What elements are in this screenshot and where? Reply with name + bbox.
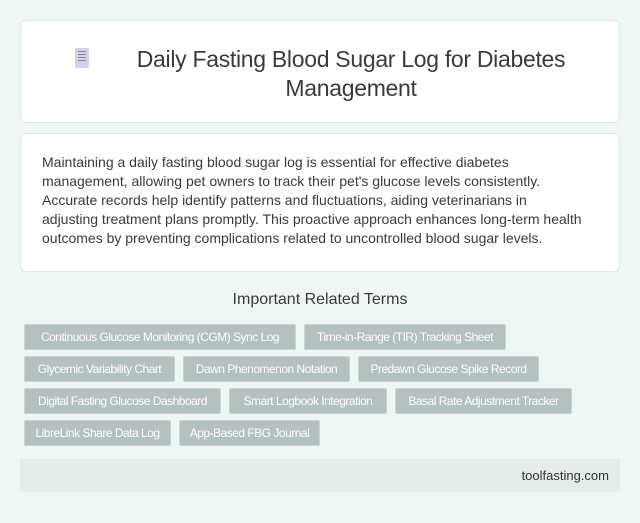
tags: Smart Logbook Integration — [244, 394, 372, 408]
tags: Basal Rate Adjustment Tracker — [408, 394, 559, 408]
tags: Time-in-Range (TIR) Tracking Sheet — [317, 330, 493, 344]
icon: receipt log — [75, 48, 89, 68]
title: Daily Fasting Blood Sugar Log for Diabetes Management — [137, 46, 565, 101]
description text: management, allowing pet owners to track their pet's glucose levels consistently. — [42, 173, 540, 189]
description text: outcomes by preventing complications related to uncontrolled blood sugar levels. — [42, 230, 542, 246]
tags: LibreLink Share Data Log — [35, 426, 160, 440]
description text: Maintaining a daily fasting blood sugar log is essential for effective diabetes — [42, 154, 509, 170]
tags: Digital Fasting Glucose Dashboard — [38, 394, 207, 408]
section heading: Important Related Terms — [233, 291, 407, 308]
tags: App-Based FBG Journal — [190, 426, 309, 440]
header card — [20, 20, 620, 123]
description text: Accurate records help identify patterns and fluctuations, aiding veterinarians in — [42, 192, 527, 208]
tags: Glycemic Variability Chart — [38, 362, 161, 376]
description text: adjusting treatment plans promptly. This proactive approach enhances long-term health — [42, 211, 582, 227]
footer — [20, 459, 620, 492]
tags: Dawn Phenomenon Notation — [196, 362, 337, 376]
tags: Continuous Glucose Monitoring (CGM) Sync Log — [41, 330, 279, 344]
description text — [42, 154, 582, 246]
description card — [20, 133, 620, 272]
footer: toolfasting.com — [522, 468, 609, 483]
tags: Predawn Glucose Spike Record — [370, 362, 527, 376]
